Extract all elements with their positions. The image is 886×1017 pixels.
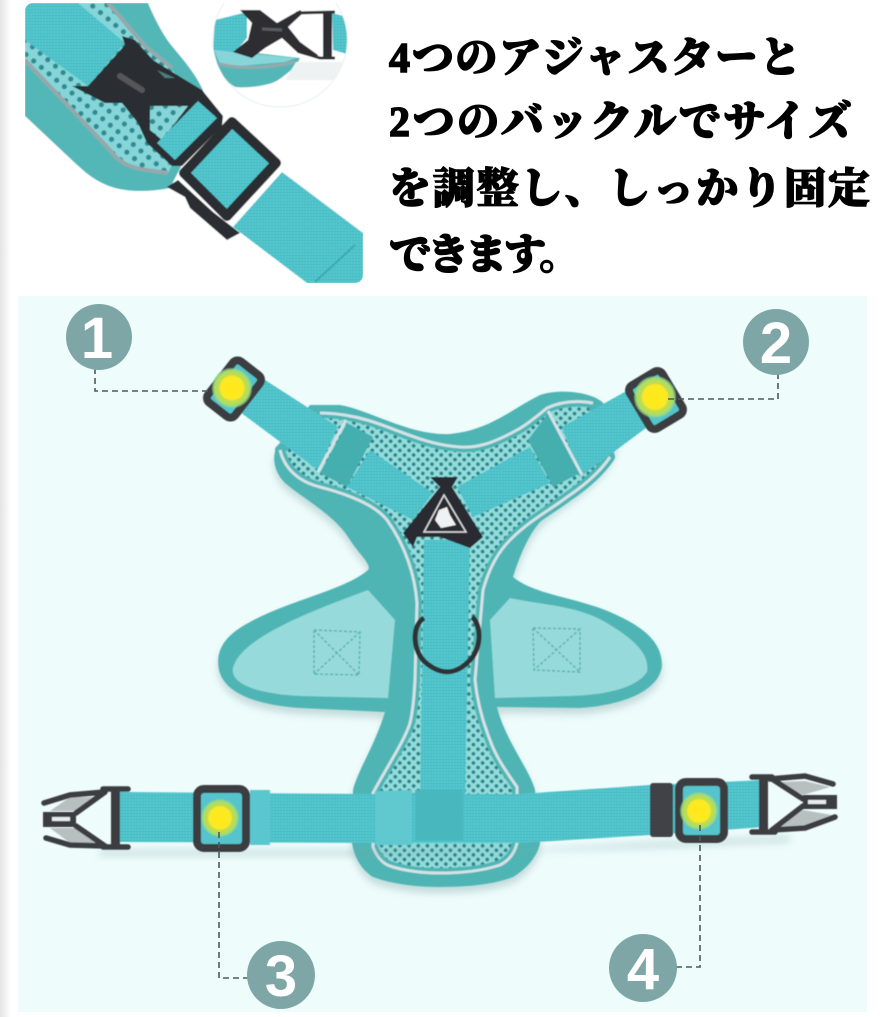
- harness diagram: [43, 358, 837, 893]
- left buckle block: [43, 812, 76, 827]
- inset buckle bar: [323, 11, 332, 59]
- number badge 2: 2: [760, 311, 792, 376]
- upper strap: [25, 3, 125, 86]
- buckle mesh window: [150, 106, 188, 140]
- strap end seam: [315, 245, 355, 282]
- leader line 2: [668, 374, 778, 399]
- panel: harness diagram: [18, 296, 867, 1012]
- long strap end: [233, 172, 363, 283]
- right buckle bar: [759, 776, 768, 833]
- strap section beside adjuster 3: [250, 790, 270, 845]
- heading text: [389, 36, 870, 279]
- keeper right: [650, 783, 673, 837]
- left buckle bar: [111, 789, 120, 848]
- right buckle slot: [808, 800, 826, 804]
- inset circle: [213, 0, 350, 107]
- right buckle block: [803, 795, 837, 809]
- mesh area: [25, 3, 176, 172]
- logo dog: [435, 507, 456, 528]
- strap stitched tab: [415, 790, 463, 840]
- waist strap: [120, 780, 765, 843]
- stitched square right: [533, 628, 580, 672]
- left buckle frame: [44, 789, 128, 847]
- number badge 3: 3: [265, 944, 297, 1009]
- inset strap left: [213, 12, 247, 52]
- left flap lining: [233, 590, 395, 698]
- black adjuster: [184, 122, 276, 216]
- buckle notch: [157, 70, 175, 78]
- leader line 4: [674, 825, 700, 967]
- buckle small window: [108, 106, 130, 125]
- inset buckle slot: [262, 29, 282, 30]
- buckle slot: [120, 76, 142, 90]
- inset rods: [296, 12, 335, 58]
- lower dark slider: [167, 180, 240, 240]
- right shoulder band: [528, 413, 580, 487]
- right inner strap: [457, 447, 550, 517]
- left buckle slot: [52, 817, 70, 821]
- inset piping: [220, 62, 295, 68]
- heading line 3: を調整し、しっかり固定: [389, 166, 870, 213]
- panel: buckle close-up photo: [25, 0, 363, 283]
- number badge 4: 4: [627, 937, 659, 1002]
- number badge 1: 1: [81, 306, 113, 371]
- right reflective tab: [548, 411, 582, 475]
- heading line 2: 2つのバックルでサイズ: [389, 100, 851, 146]
- inset grey base: [285, 62, 350, 80]
- leader line 3: [219, 832, 250, 978]
- D-ring: [415, 617, 479, 672]
- left strap buckle: [43, 789, 128, 848]
- right flap lining: [490, 598, 647, 698]
- drop shadow: [218, 398, 662, 893]
- number badge 4: [609, 934, 677, 1002]
- inset harness padding: [213, 48, 300, 87]
- left buckle grey fill: [50, 797, 97, 843]
- marker dot 1: [212, 368, 252, 408]
- black side-release buckle: [72, 36, 223, 166]
- stitched square left: [314, 630, 360, 675]
- mid strap: [157, 101, 217, 160]
- leader line 1: [95, 368, 212, 391]
- harness body: [218, 392, 662, 887]
- right buckle grey fill: [778, 781, 832, 827]
- number badge 3: [247, 941, 315, 1009]
- harness padded edge: [25, 3, 205, 191]
- adjuster 4: [679, 782, 724, 839]
- inset mesh: [214, 50, 296, 66]
- center strap: [420, 540, 470, 800]
- right strap buckle: [752, 776, 837, 833]
- marker dot 4: [680, 792, 718, 830]
- number badge 1: [66, 304, 132, 371]
- waist strap shadow: [100, 836, 790, 856]
- number badge 2: [743, 309, 809, 376]
- triangle logo: [424, 495, 466, 532]
- left inner strap: [347, 450, 433, 520]
- left reflective tab: [318, 420, 346, 472]
- inset black buckle: [233, 10, 318, 58]
- right buckle frame: [752, 776, 835, 832]
- right shoulder strap: [562, 389, 650, 477]
- adjuster 2: [627, 369, 685, 431]
- mesh panel with binding: [280, 402, 610, 873]
- triangle hardware: [403, 477, 483, 548]
- reflective piping: [280, 402, 610, 873]
- reflective piping: [25, 3, 172, 173]
- heading line 1: 4つのアジャスターと: [389, 36, 801, 82]
- left shoulder strap: [240, 378, 338, 470]
- strap loop: [375, 790, 412, 845]
- left shoulder band: [320, 423, 373, 487]
- marker dot 2: [634, 376, 676, 418]
- adjuster 3: [197, 789, 246, 848]
- marker dot 3: [201, 799, 239, 837]
- heading line 4: できます。: [389, 233, 581, 279]
- adjuster 1: [205, 358, 263, 420]
- inset strap right: [332, 13, 347, 54]
- left edge shade: [0, 0, 11, 1017]
